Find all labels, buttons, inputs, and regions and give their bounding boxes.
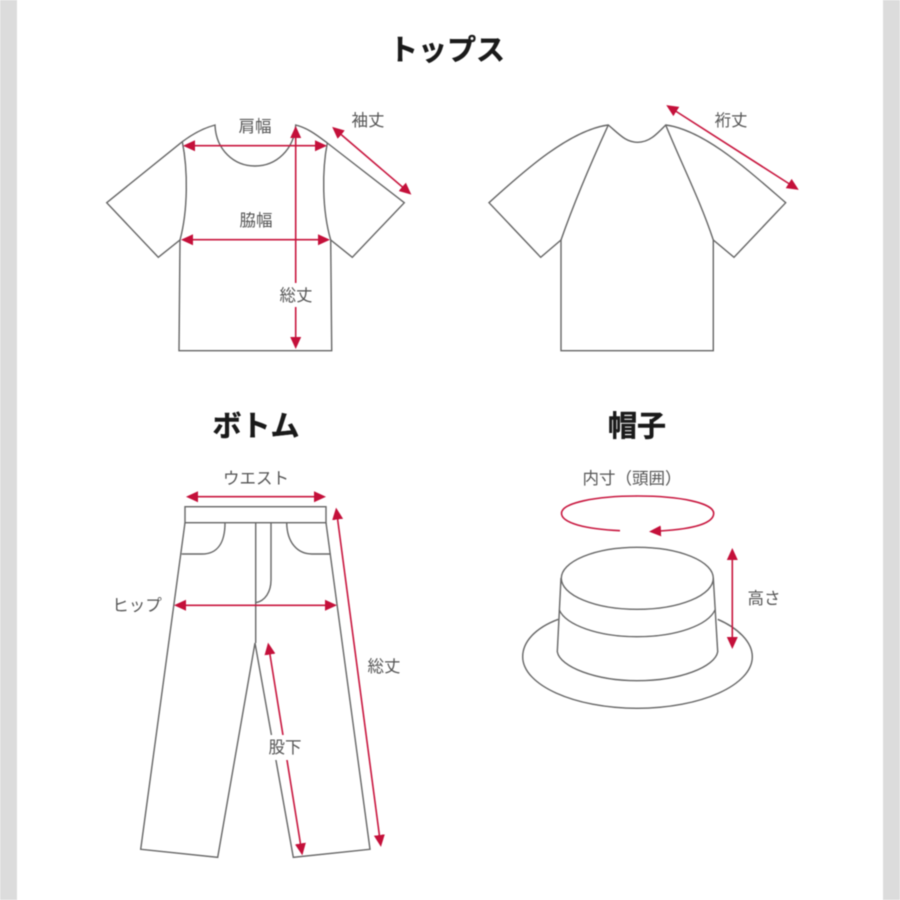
heading: hat: 帽子 [608,410,666,443]
panel: trousers diagram [112,469,400,857]
arrow: hip [185,604,326,606]
arrow: chest width [192,239,319,241]
arrow: sleeve length [340,134,403,188]
heading: bottoms: ボトム [212,410,300,443]
arrow: raglan sleeve length [676,111,790,184]
arrow: head circumference ring [562,496,714,531]
label: sleeve length: 袖丈 [352,111,384,130]
arrow: total length lower [295,307,297,338]
arrow: shoulder width [194,145,316,147]
label: total length: 総丈 [368,657,400,676]
trousers outline [141,507,370,857]
label: waist: ウエスト [223,469,289,488]
arrow: total length upper [295,137,297,283]
panel: raglan T-shirt diagram [489,111,790,351]
raglan outline [489,125,786,351]
label: height: 高さ [748,589,780,608]
heading: tops: トップス [389,34,505,67]
panel: set-in sleeve T-shirt diagram [107,111,404,351]
left grey side bar [0,0,17,900]
T-shirt outline [107,125,404,351]
label: inseam: 股下 [268,738,302,757]
hat outline [523,547,752,708]
label: total length: 総丈 [280,286,312,305]
label background: inseam [267,735,303,760]
label: shoulder width: 肩幅 [238,117,272,136]
label: inner size: 内寸（頭囲） [582,469,682,488]
right grey side bar [883,0,900,900]
arrow: total length [338,518,380,836]
label: hip: ヒップ [112,596,162,615]
label: raglan sleeve length: 裄丈 [714,111,748,130]
arrow: inseam [270,654,301,844]
arrow: height [731,559,733,638]
label: chest width: 脇幅 [240,211,272,230]
panel: hat diagram [523,469,780,708]
arrow: waist [197,496,315,498]
